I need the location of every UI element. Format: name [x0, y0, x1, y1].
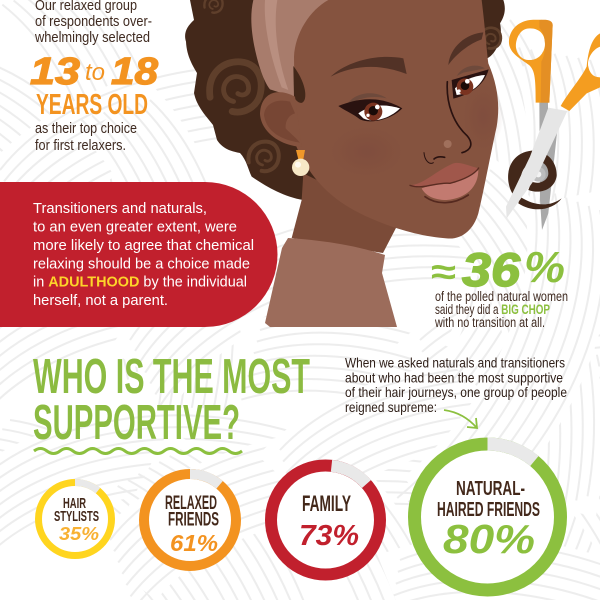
donut: family 73%: [271, 466, 380, 574]
text: supportive intro: reigned supreme:: [345, 399, 437, 415]
stat: 13 to 18 years old: YEARS OLD: [36, 89, 148, 121]
text: supportive intro: of their hair journeys, one group of people: [345, 384, 567, 400]
panel: red adulthood callout: herself, not a parent.: [33, 292, 168, 309]
donut: relaxed friends 61%: RELAXED: [165, 493, 217, 514]
donut: relaxed friends 61%: FRIENDS: [168, 510, 219, 530]
hair patch at temple: [293, 66, 305, 103]
stat: 13 to 18 years old: 13: [30, 51, 80, 93]
left eyebrow: [331, 57, 407, 77]
scissors: [506, 20, 600, 230]
stat: 36 percent big chop: of the polled natural women: [435, 289, 568, 304]
ear: [260, 92, 302, 147]
turtleneck collar: [265, 238, 397, 327]
text: top choice: as their top choice: [35, 120, 137, 137]
panel: red adulthood callout: in ADULTHOOD by the individual: [33, 274, 247, 291]
neck: [292, 173, 427, 253]
blush: [330, 127, 403, 177]
text: relaxed group intro: of respondents over-: [35, 13, 152, 30]
panel: red adulthood callout: to an even greater extent, were: [33, 219, 237, 236]
face: [294, 0, 498, 239]
stat: 36 percent big chop: 36: [462, 243, 521, 296]
donut: relaxed friends 61%: [144, 474, 236, 566]
headband: [251, 0, 333, 97]
stat: 36 percent big chop: with no transition at all.: [434, 315, 545, 330]
left eye: [338, 93, 402, 121]
donut: relaxed friends 61%: 61%: [170, 530, 218, 556]
stat: 13 to 18 years old: to: [85, 59, 105, 86]
earring: [292, 150, 309, 176]
heading: who is the most supportive: SUPPORTIVE?: [33, 396, 240, 450]
right eye: [452, 66, 489, 99]
panel: red adulthood callout: [0, 182, 278, 327]
stat: 36 percent big chop: said they did a BIG CHOP: [435, 302, 550, 317]
stat: 13 to 18 years old: [30, 51, 159, 121]
donut: natural-haired friends 80%: [414, 444, 560, 590]
heading: who is the most supportive: WHO IS THE MOST: [33, 350, 310, 404]
donut: family 73%: 73%: [299, 520, 359, 552]
hair: [185, 0, 505, 200]
text: supportive intro: [345, 354, 567, 415]
stat: 36 percent big chop: [431, 243, 568, 330]
portrait illustration: [185, 0, 600, 327]
panel: red adulthood callout: more likely to agree that chemical: [33, 237, 254, 254]
text: relaxed group intro: whelmingly selected: [34, 29, 150, 46]
arrow: [444, 410, 477, 428]
stat: 36 percent big chop: ≈: [431, 251, 456, 292]
panel: red adulthood callout: relaxing should be a choice made: [33, 255, 250, 272]
donut: hair stylists 35%: STYLISTS: [54, 509, 99, 525]
donut: natural-haired friends 80%: 80%: [443, 516, 535, 562]
nose: [424, 82, 471, 163]
text: top choice: for first relaxers.: [35, 137, 126, 154]
text: supportive intro: When we asked naturals and transitioners: [345, 354, 565, 370]
heading: who is the most supportive: [33, 350, 310, 450]
hair swirls: [204, 0, 501, 171]
right eyebrow: [448, 32, 483, 65]
donut: hair stylists 35%: 35%: [59, 524, 99, 544]
panel: red adulthood callout: Transitioners and naturals,: [33, 200, 207, 217]
text: relaxed group intro: [34, 0, 152, 46]
donut: hair stylists 35%: HAIR: [63, 496, 86, 512]
text: top choice: [35, 120, 137, 154]
donut: family 73%: FAMILY: [302, 491, 351, 516]
stat: 36 percent big chop: %: [524, 243, 565, 292]
donut: hair stylists 35%: [38, 482, 112, 556]
lips: [410, 163, 479, 203]
stat: 13 to 18 years old: 18: [111, 51, 159, 93]
wavy underline: [34, 448, 242, 454]
donut: natural-haired friends 80%: NATURAL-: [456, 478, 525, 500]
text: supportive intro: about who had been the most supportive: [345, 370, 563, 386]
